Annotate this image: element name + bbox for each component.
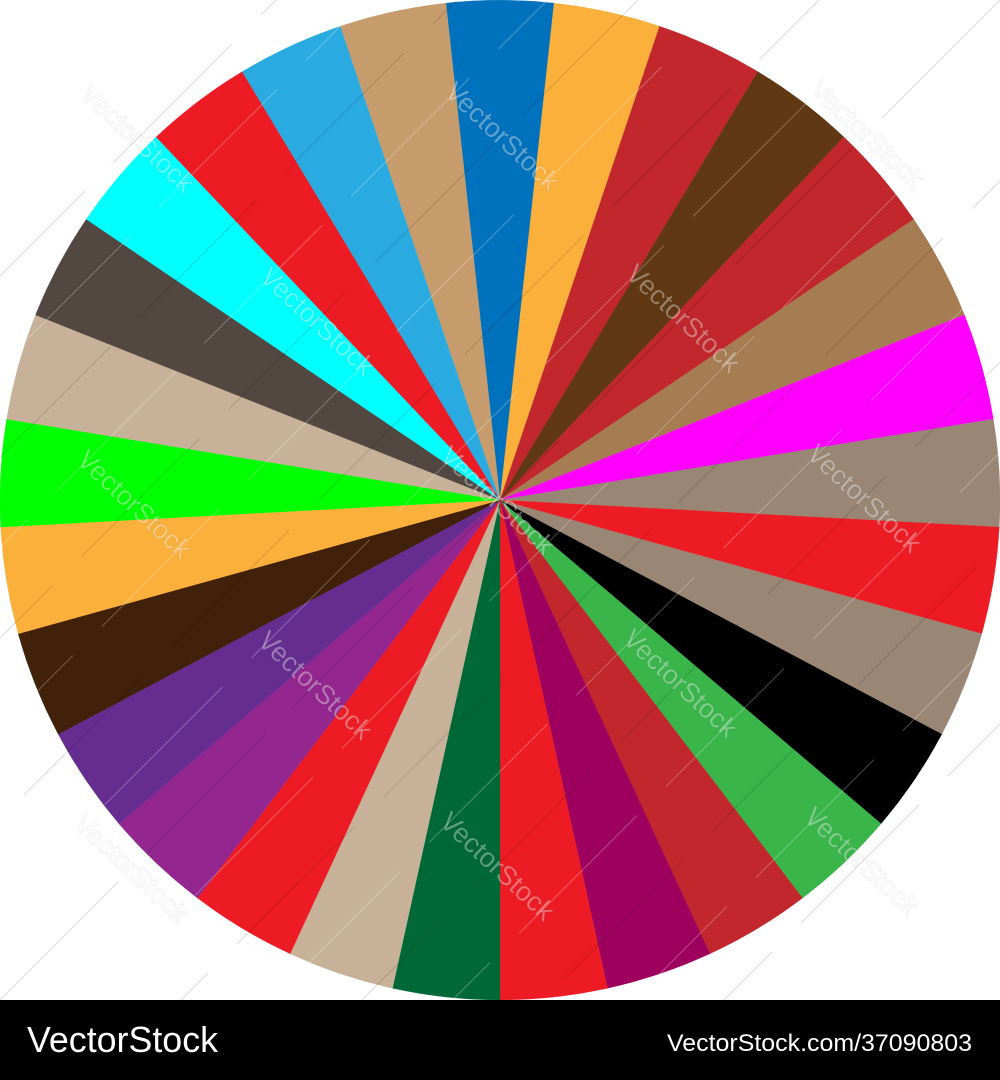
- watermark: VectorStock: [71, 444, 197, 565]
- wedge: bright red 2: [500, 500, 608, 1000]
- wedge: lime: [0, 419, 500, 527]
- wedge: dark brown: [500, 72, 844, 500]
- watermark: VectorStock: [801, 438, 927, 559]
- wedge: very dark brown: [18, 500, 500, 734]
- wedge: beige: [290, 500, 500, 988]
- wedge: brown: [500, 219, 964, 500]
- wedge: tan: [340, 3, 500, 500]
- wedge: black: [500, 500, 942, 824]
- watermark: VectorStock: [617, 623, 743, 744]
- wedge: orange: [500, 3, 660, 500]
- watermark: VectorStock: [798, 801, 924, 922]
- watermark: VectorStock: [434, 440, 560, 561]
- watermark: VectorStock: [804, 74, 930, 195]
- footer brand name: VectorStock: [27, 1019, 219, 1060]
- wedge: orange 2: [1, 500, 500, 634]
- wedge: red 2: [500, 137, 914, 500]
- wedge: beige 2: [7, 315, 500, 500]
- wedge: red: [500, 26, 758, 500]
- wedge: magenta: [500, 315, 993, 500]
- wedge: blue: [446, 0, 554, 500]
- watermark: VectorStock: [74, 78, 200, 199]
- wedge: violet: [58, 500, 500, 824]
- wedge: taupe: [500, 419, 1000, 527]
- wedge: crimson purple: [500, 500, 710, 988]
- watermarks: repeated VectorStock text: [68, 74, 930, 929]
- wedge: red 3: [500, 500, 802, 954]
- footer image id: VectorStock.com/37090803: [667, 1030, 972, 1057]
- wedge: bright red 4: [156, 72, 500, 500]
- wedge: purple: [119, 500, 500, 898]
- watermark: VectorStock: [620, 258, 746, 379]
- wedge: sky blue: [242, 26, 500, 500]
- watermark: VectorStock: [439, 76, 565, 197]
- wedge: taupe 2: [500, 500, 982, 734]
- watermark: VectorStock: [434, 806, 560, 927]
- wedge: charcoal brown: [36, 219, 500, 500]
- watermark: VectorStock: [68, 808, 194, 929]
- wedge: dark green: [392, 500, 500, 1000]
- footer bar: [0, 1000, 1000, 1080]
- watermark: VectorStock: [252, 625, 378, 746]
- wedge: bright red 3: [198, 500, 500, 954]
- wedge: cyan: [86, 137, 500, 500]
- wedge: green: [500, 500, 881, 898]
- wedge: bright red: [500, 500, 999, 634]
- watermark: VectorStock: [254, 261, 380, 382]
